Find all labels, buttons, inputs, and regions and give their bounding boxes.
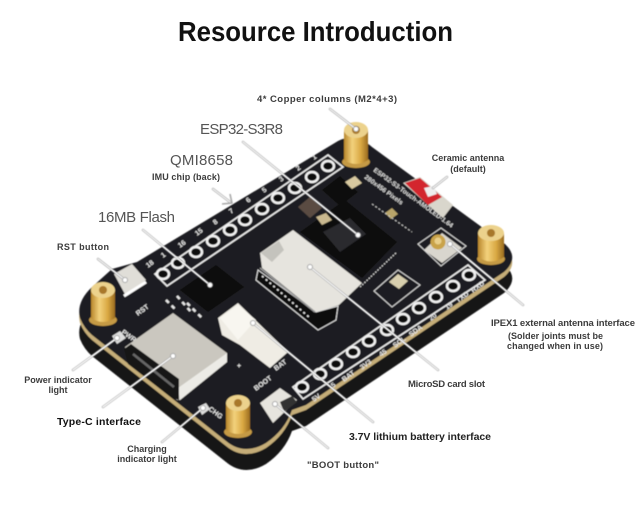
- top header silkscreen numbers: 16: [177, 239, 188, 250]
- label: power indicator: Power indicator: [24, 375, 92, 385]
- bottom header silkscreen labels: [311, 280, 486, 404]
- label: ceramic antenna: (default): [450, 164, 486, 174]
- leader end dots: [114, 126, 452, 410]
- silkscreen labels: CHG: [207, 406, 224, 421]
- silkscreen labels: RST: [135, 303, 151, 318]
- top header silkscreen numbers: 1: [160, 252, 167, 260]
- top header silkscreen numbers: 7: [228, 208, 235, 216]
- top header silkscreen numbers: 3: [278, 176, 285, 184]
- top pin header outline: [155, 155, 343, 286]
- bottom header silkscreen labels: RXD: [470, 280, 486, 295]
- label: ceramic antenna: Ceramic antenna: [432, 153, 505, 163]
- USB Type-C connector: [124, 313, 227, 400]
- copper column: bottom: [224, 395, 252, 438]
- bottom header silkscreen labels: BAT: [341, 369, 357, 384]
- label: MicroSD card slot: MicroSD card slot: [408, 379, 486, 390]
- BOOT button: [260, 388, 297, 423]
- top header silkscreen numbers: 8: [212, 219, 219, 227]
- board name silkscreen: 280x456 Pixels: [363, 174, 404, 207]
- bottom header silkscreen labels: TXD: [455, 291, 471, 305]
- top header pins: [157, 161, 334, 279]
- board top surface: [79, 138, 512, 449]
- top header silkscreen numbers: 18: [145, 259, 156, 270]
- label: copper columns: 4* Copper columns (M2*4+3): [257, 94, 397, 105]
- copper column: left: [89, 282, 117, 326]
- top header silkscreen numbers: 2: [295, 165, 302, 173]
- label: 16MB Flash: 16MB Flash: [98, 209, 175, 226]
- arrow: IMU chip: [222, 194, 232, 204]
- battery connector: [218, 303, 288, 368]
- label: battery interface: 3.7V lithium battery interface: [349, 431, 491, 443]
- label: IPEX1 antenna interface: [491, 318, 635, 351]
- label: IPEX1 antenna interface: changed when in use): [507, 341, 603, 351]
- ceramic antenna: [403, 177, 453, 218]
- silkscreen labels: BOOT: [253, 375, 274, 393]
- label: charging indicator: indicator light: [117, 454, 177, 464]
- copper column: top: [342, 122, 370, 168]
- board gold edge: [79, 143, 512, 454]
- bottom header silkscreen labels: 19: [444, 301, 455, 312]
- silkscreen labels: [120, 303, 289, 421]
- circuit board illustration: [79, 122, 512, 470]
- top header silkscreen numbers: 5: [261, 187, 268, 195]
- bottom header silkscreen labels: 45: [378, 348, 389, 359]
- bottom header silkscreen labels: 5V: [311, 393, 322, 404]
- label: charging indicator: Charging: [127, 444, 167, 454]
- leader lines: [73, 109, 523, 448]
- label: power indicator: light: [48, 385, 68, 395]
- bottom header silkscreen labels: 5: [330, 382, 337, 390]
- flash chip legs: [166, 296, 202, 318]
- label: power indicator: [24, 375, 92, 395]
- label: IPEX1 antenna interface: (Solder joints must be: [508, 331, 603, 341]
- QMI8658 component: [298, 197, 322, 218]
- small passive components: [316, 176, 420, 307]
- silkscreen labels: BAT: [273, 358, 289, 373]
- label: RST button: RST button: [57, 242, 109, 252]
- RST button: [114, 264, 146, 296]
- copper column: right: [477, 225, 505, 265]
- bottom header silkscreen labels: 3V3: [359, 359, 373, 372]
- bottom header silkscreen labels: 20: [428, 312, 439, 323]
- top header silkscreen numbers: 1: [311, 154, 318, 162]
- IPEX connector: [418, 228, 466, 266]
- label: Type-C interface: Type-C interface: [57, 416, 141, 428]
- label: ceramic antenna: [432, 153, 505, 174]
- bottom header silkscreen labels: SCL: [392, 335, 408, 350]
- silkscreen labels: +: [237, 363, 241, 370]
- label: IMU chip: IMU chip (back): [152, 172, 220, 182]
- label: QMI8658: QMI8658: [170, 152, 233, 169]
- top header silkscreen numbers: 15: [194, 227, 205, 238]
- label: IPEX1 antenna interface: IPEX1 external antenna interface: [491, 318, 635, 329]
- bottom header silkscreen labels: SDA: [408, 324, 424, 339]
- label: ESP32-S3R8: ESP32-S3R8: [200, 121, 283, 138]
- flash chip: [180, 265, 244, 312]
- ESP32 chip: [300, 200, 397, 287]
- board name silkscreen: ESP32-S3-Touch-AMOLED-1.64: [372, 167, 454, 230]
- top header silkscreen numbers: 6: [245, 197, 252, 205]
- MicroSD card slot: [256, 230, 362, 330]
- bottom header pins: [296, 270, 475, 392]
- top header silkscreen numbers: [145, 154, 318, 270]
- board underside: [79, 159, 512, 470]
- secondary small chip: [322, 176, 358, 206]
- label: BOOT button: "BOOT button": [307, 460, 379, 471]
- label: charging indicator: [117, 444, 177, 464]
- bottom pin header outline: [293, 265, 485, 399]
- silkscreen labels: PWR: [120, 329, 137, 344]
- LEDs: [112, 331, 210, 415]
- title: Resource Introduction: [178, 16, 453, 47]
